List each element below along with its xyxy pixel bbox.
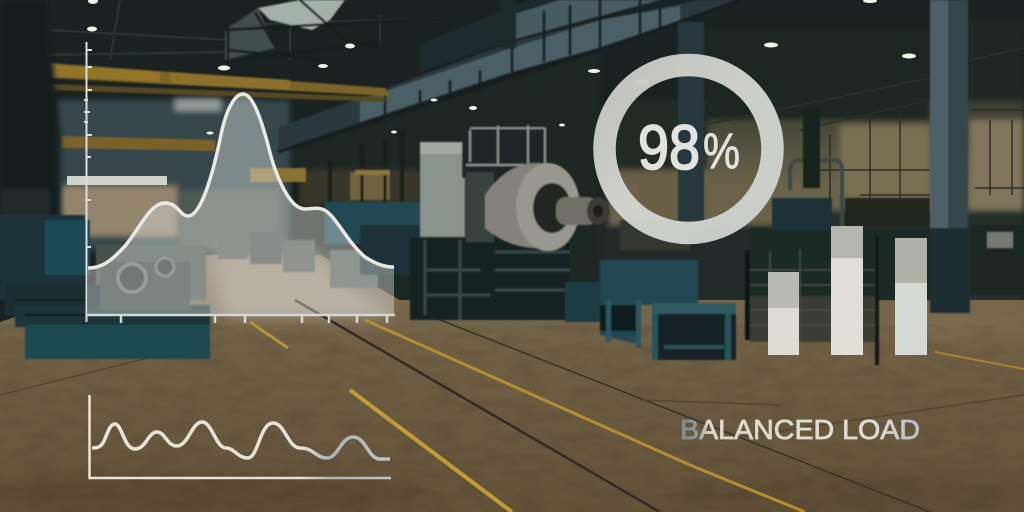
ring — [604, 65, 772, 233]
label: balanced load: BALANCED LOAD — [680, 414, 920, 445]
steel girder band — [278, 0, 740, 152]
axes — [90, 395, 391, 478]
y axis with ticks — [84, 42, 92, 322]
wall panel lines — [705, 48, 1024, 200]
value: 98%: % — [703, 123, 740, 179]
area fill — [88, 94, 394, 315]
overhead yellow crane beam — [8, 63, 390, 186]
bar 1 — [768, 272, 799, 355]
end windows strip — [67, 176, 167, 185]
mid hall dark wall between corridor and machine — [280, 50, 600, 300]
left machinery — [0, 215, 210, 359]
value: 98% — [638, 113, 740, 183]
corridor machines row — [96, 202, 420, 300]
back wall right side — [590, 20, 1024, 310]
bar 3 — [895, 238, 927, 355]
right machinery — [620, 160, 1024, 365]
central press machine — [410, 125, 609, 320]
skylight — [225, 0, 440, 62]
bar 2 — [831, 226, 863, 355]
ceiling lights — [87, 0, 916, 134]
donut gauge: 98% — [604, 65, 772, 233]
teal bench machines — [565, 260, 736, 360]
area chart: large bell curve — [84, 42, 395, 323]
curve line — [88, 94, 394, 268]
floor rails and yellow lines — [0, 300, 1024, 512]
distant corridor haze — [55, 98, 290, 250]
x axis with ticks — [86, 315, 395, 323]
floor grain — [0, 325, 1024, 512]
ceiling steel trusses — [40, 0, 440, 60]
small line chart — [90, 395, 391, 478]
floor — [0, 252, 1024, 512]
value: 98%: 98 — [638, 113, 700, 183]
support columns — [500, 0, 970, 313]
left dark wall — [0, 0, 60, 300]
floor shade patches — [0, 311, 1024, 512]
wave line — [92, 422, 390, 459]
mid hall columns and lit windows — [295, 130, 402, 205]
bar chart: three bars — [768, 226, 927, 355]
